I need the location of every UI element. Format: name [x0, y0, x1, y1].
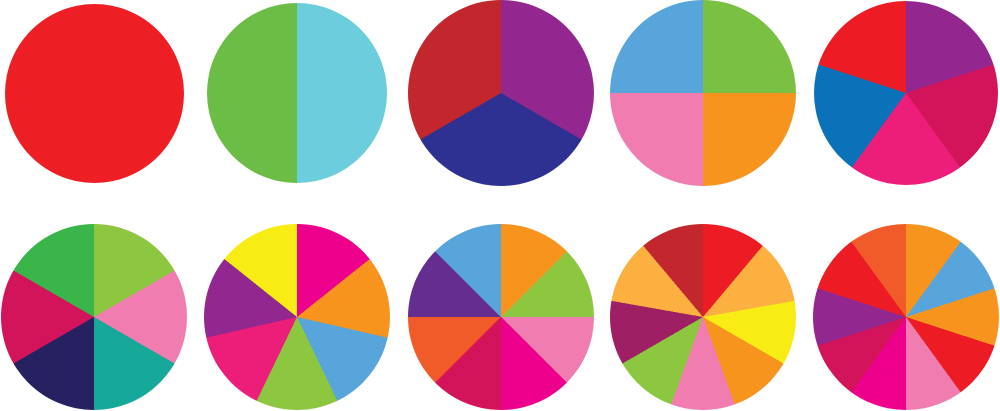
pie 2: halves: [207, 3, 387, 183]
pie 6: sixths: [1, 224, 187, 410]
pie 10: tenths: [813, 224, 999, 410]
pie 9: ninths: [610, 224, 796, 410]
pie 1: single red: [5, 4, 184, 183]
pie 3: thirds: [408, 0, 594, 186]
pie 5: fifths: [814, 1, 998, 185]
pie 8: eighths: [408, 224, 594, 410]
pie 7: sevenths: [204, 224, 390, 410]
pie 4: quarters: [610, 0, 796, 186]
